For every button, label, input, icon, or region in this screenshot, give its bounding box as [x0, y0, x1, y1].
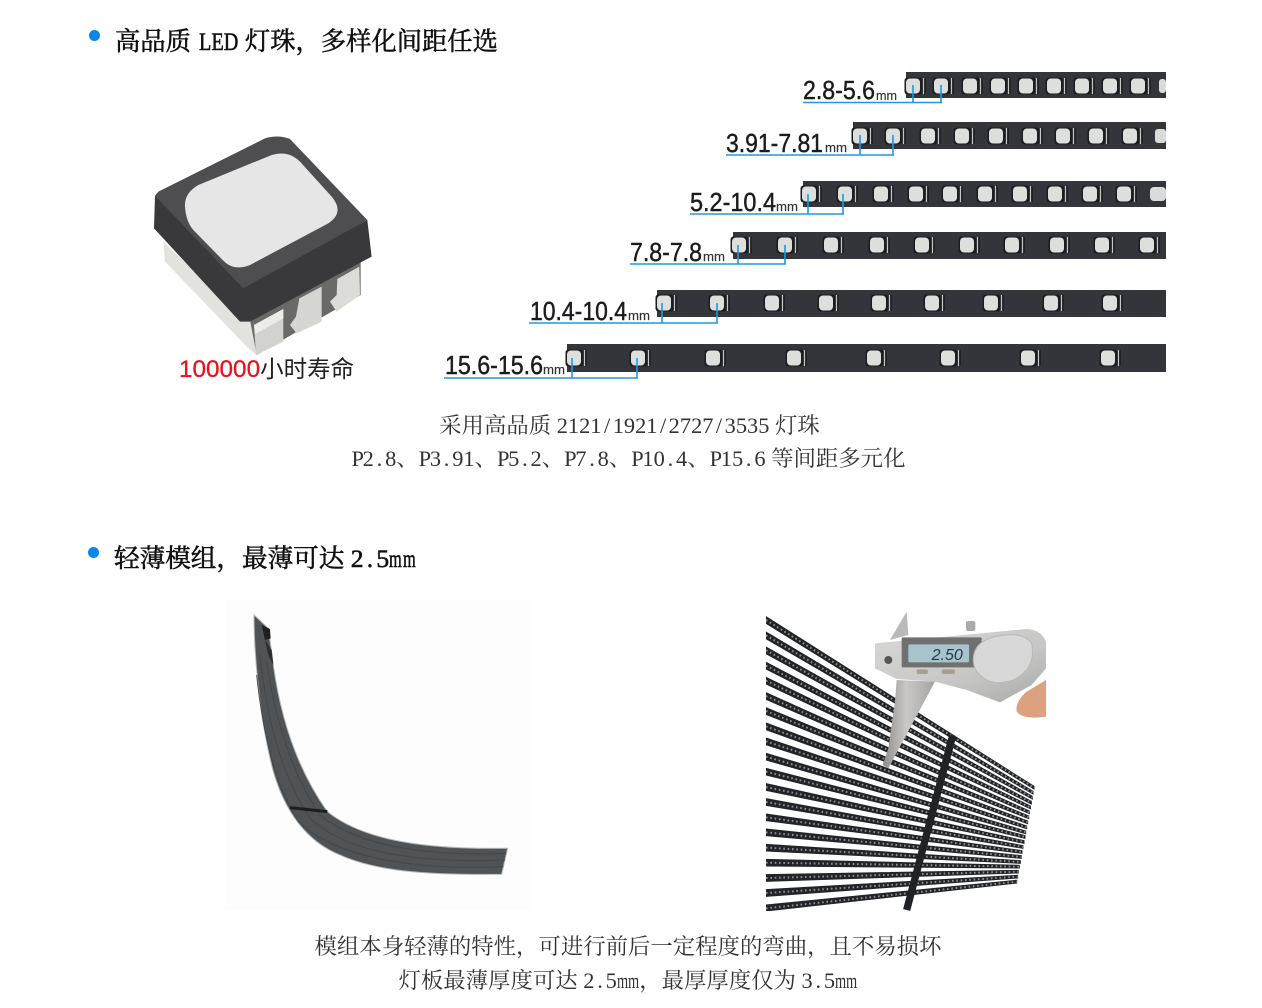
strip: 10.4-10.4mm pitch [529, 290, 1166, 326]
bullet: section 1 [89, 30, 100, 41]
strip: 7.8-7.8mm pitch: 7.8-7.8 [630, 237, 702, 267]
strip: 5.2-10.4mm pitch: 5.2-10.4 [690, 187, 776, 217]
caption: section 2 line 2: m [846, 968, 857, 993]
strip: 15.6-15.6mm pitch: mm [543, 362, 565, 377]
caption: section 2 line 2: . [597, 968, 603, 993]
label: 100000 hours lifetime: 100000小时寿命 [179, 356, 354, 383]
caliper body [875, 612, 1046, 768]
strip: 7.8-7.8mm pitch: mm [703, 249, 725, 264]
caption: section 2 line 1: 模组本身轻薄的特性，可进行前后一定程度的弯曲，且不易损坏 [315, 934, 941, 959]
strip: 5.2-10.4mm pitch: mm [776, 199, 798, 214]
strip: 2.8-5.6mm pitch: mm [876, 88, 897, 103]
caption: section 2 line 2: . [816, 968, 821, 993]
heading: thin module: m [403, 544, 416, 573]
caption: section 1 line 1: / [660, 413, 666, 438]
strip: 5.2-10.4mm pitch [690, 181, 1166, 217]
heading: high quality LED beads: LED [199, 28, 238, 56]
strip: 15.6-15.6mm pitch: 15.6-15.6 [445, 350, 543, 380]
caption: section 1 line 1: / [604, 413, 610, 438]
caption: section 1 line 2: . [522, 446, 528, 471]
caption: section 1 line 2: . [444, 446, 449, 471]
caption: section 1 line 1: 采用高品质 2121 1921 2727 3535 灯珠 [439, 413, 820, 438]
mesh strips [766, 617, 1034, 911]
caption: section 1 line 2: . [589, 446, 595, 471]
heading: thin module: . [367, 544, 373, 573]
caliper body: 2.50 [931, 647, 963, 664]
caption: section 1 line 1: / [716, 413, 722, 438]
strip: 15.6-15.6mm pitch [444, 344, 1166, 380]
strip: 3.91-7.81mm pitch: 3.91-7.81 [726, 128, 823, 158]
heading: high quality LED beads: 高品质 灯珠，多样化间距任选 [115, 28, 498, 56]
caption: section 1 line 2: P2 8、P3 91、P5 2、P7 8、P10 4、P15 6 等间距多元化 [352, 446, 905, 471]
strip: 10.4-10.4mm pitch: 10.4-10.4 [530, 296, 627, 326]
caption: section 1 line 2: . [377, 446, 382, 471]
image: bent flexible module [225, 600, 530, 910]
strip: 10.4-10.4mm pitch: mm [628, 308, 650, 323]
strip: 3.91-7.81mm pitch: mm [825, 140, 847, 155]
image: caliper measuring LED mesh [766, 612, 1046, 911]
strip: 7.8-7.8mm pitch [630, 232, 1166, 267]
strip: 2.8-5.6mm pitch: 2.8-5.6 [803, 75, 875, 105]
strip: 3.91-7.81mm pitch [726, 122, 1166, 158]
caption: section 2 line 2: m [617, 968, 628, 993]
heading: thin module: 轻薄模组，最薄可达 2 5 [114, 544, 389, 573]
caption: section 2 line 2: 灯板最薄厚度可达 2 5 ，最厚厚度仅为 3 5 [398, 968, 835, 993]
heading: thin module: m [389, 544, 402, 573]
caption: section 1 line 2: . [668, 446, 673, 471]
caption: section 1 line 2: . [746, 446, 752, 471]
bullet: section 2 [88, 547, 99, 558]
caption: section 2 line 2: m [628, 968, 639, 993]
image: LED chip close-up [154, 136, 372, 355]
caption: section 2 line 2: m [835, 968, 846, 993]
strip: 2.8-5.6mm pitch [803, 72, 1166, 105]
